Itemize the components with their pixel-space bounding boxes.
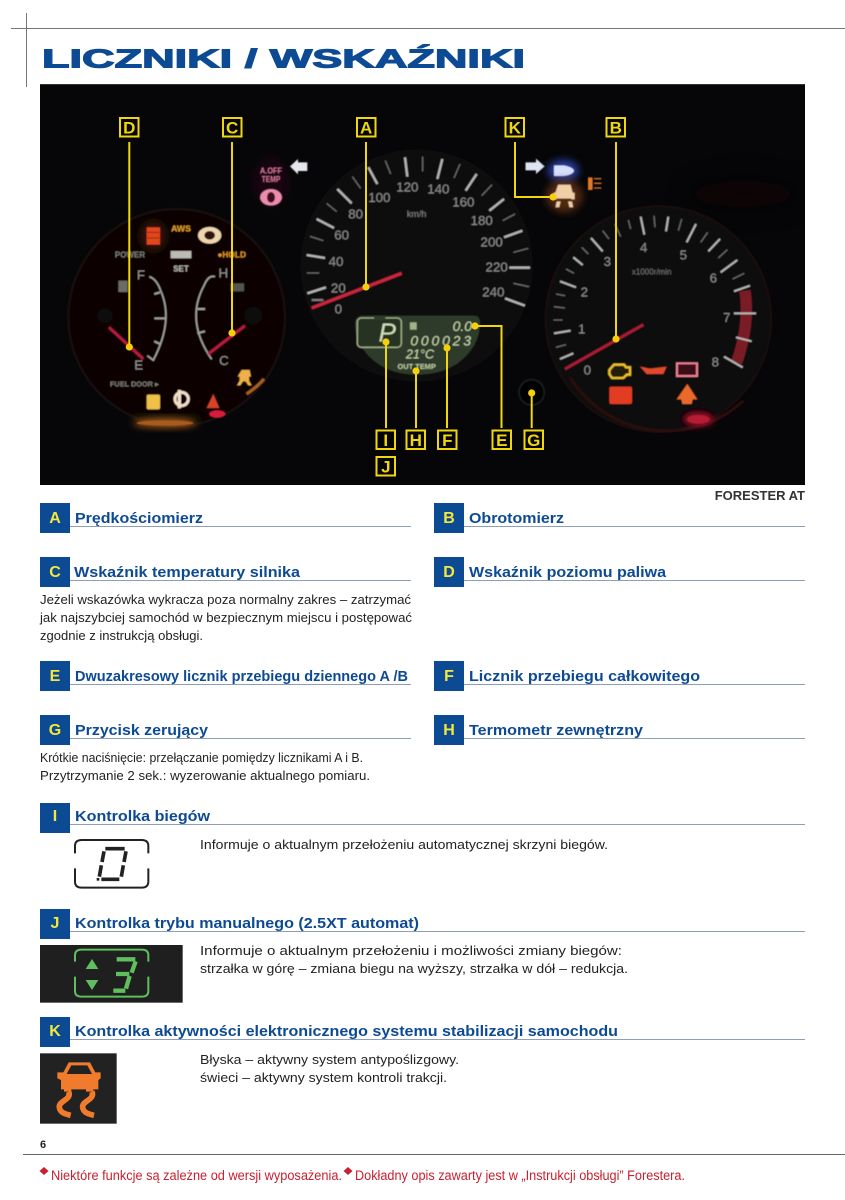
left cluster: fuel and temperature gauges: A.OFF: [260, 165, 282, 175]
item H: Termometr zewnętrzny: [469, 722, 644, 739]
label: A: A: [360, 118, 372, 138]
label: K: K: [509, 118, 522, 138]
rpm numbers: 4: [640, 240, 648, 255]
page number: 6: [40, 1139, 46, 1151]
item H: H: [443, 722, 455, 739]
item F: F: [444, 668, 454, 685]
label: E: [492, 430, 511, 450]
speed numbers: 0: [335, 301, 342, 316]
label: C: C: [226, 118, 238, 138]
footer note: [40, 1167, 685, 1183]
label: H: H: [410, 431, 422, 450]
speed numbers: 220: [486, 260, 508, 275]
gear indicator on LCD: [357, 316, 401, 347]
speedometer: [302, 151, 544, 405]
text: item G description: Przytrzymanie 2 sek.: wyzerowanie aktualnego pomiaru.: [40, 768, 370, 783]
item I: Kontrolka biegów: [75, 808, 210, 825]
gauge letters: [134, 266, 229, 372]
text: item C description: jak najszybciej samochód w bezpiecznym miejscu i postępować: [39, 610, 413, 625]
item H: [434, 715, 805, 745]
label: C: [223, 118, 242, 138]
speed numbers: 200: [481, 235, 503, 250]
label: G: G: [527, 431, 540, 450]
text: item K description: Błyska – aktywny system antypoślizgowy.: [200, 1052, 459, 1067]
speed numbers: [329, 180, 508, 316]
rpm numbers: 2: [581, 285, 588, 300]
item A: A: [49, 510, 61, 527]
text: item C description: Jeżeli wskazówka wykracza poza normalny zakres – zatrzymać: [40, 592, 412, 607]
item B: [434, 503, 805, 533]
label: H: [406, 430, 425, 450]
gauge letters: E: [134, 357, 143, 372]
speed numbers: 40: [329, 254, 343, 269]
item G: [40, 715, 411, 745]
label: F: F: [442, 431, 452, 450]
text: item G description: Krótkie naciśnięcie: przełączanie pomiędzy licznikami A i B.: [40, 750, 363, 765]
item C: [40, 557, 411, 587]
item E: Dwuzakresowy licznik przebiegu dziennego A /B: [75, 668, 408, 685]
label: B: [606, 118, 625, 138]
speed numbers: 140: [427, 182, 449, 197]
icon: stability control: [40, 1053, 117, 1124]
label: J: [376, 457, 395, 476]
gauge letters: F: [137, 268, 145, 283]
speed numbers: 20: [331, 281, 346, 296]
major ticks: [307, 157, 530, 306]
item D: D: [443, 564, 455, 581]
label: I: [376, 430, 395, 450]
left cluster: fuel and temperature gauges: TEMP: [262, 174, 281, 184]
speed numbers: 240: [482, 284, 504, 299]
speedometer: km/h: [407, 209, 426, 219]
item G: Przycisk zerujący: [75, 722, 209, 739]
rpm numbers: 3: [604, 254, 611, 269]
crop marks: [11, 13, 845, 87]
tachometer and warning lights: [525, 159, 803, 432]
footer note: Dokładny opis zawarty jest w „Instrukcji obsługi” Forestera.: [355, 1168, 685, 1183]
item A: [40, 503, 411, 533]
left cluster: fuel and temperature gauges: POWER: [115, 251, 145, 260]
item G: G: [49, 722, 61, 739]
item K: Kontrolka aktywności elektronicznego systemu stabilizacji samochodu: [75, 1023, 618, 1040]
item F: [434, 661, 805, 691]
panel: dashboard photo: [40, 84, 805, 485]
item J: J: [51, 915, 59, 932]
item J: [40, 909, 805, 939]
rpm numbers: 1: [578, 322, 585, 337]
left cluster: fuel and temperature gauges: AWS: [171, 223, 191, 233]
rpm numbers: 6: [710, 271, 717, 286]
speedometer: 000023: [410, 333, 471, 349]
rpm numbers: 5: [680, 247, 687, 262]
item B: B: [443, 510, 455, 527]
item I: [40, 803, 805, 833]
speedometer: 0.0: [453, 318, 472, 334]
item D: Wskaźnik poziomu paliwa: [469, 564, 667, 581]
item K: K: [49, 1023, 61, 1040]
item F: Licznik przebiegu całkowitego: [469, 668, 700, 685]
speed numbers: 60: [334, 227, 349, 242]
text: item J description: [200, 943, 628, 976]
tachometer and warning lights: x1000r/min: [632, 267, 671, 276]
speed numbers: 80: [348, 207, 363, 222]
rpm numbers: 7: [723, 310, 730, 325]
item C: C: [49, 564, 61, 581]
label: I: I: [383, 431, 388, 450]
label: J: J: [381, 458, 391, 476]
label: G: [524, 430, 543, 450]
footer note: Niektóre funkcje są zależne od wersji wyposażenia.: [51, 1168, 342, 1183]
gear indicator on LCD: P: [379, 317, 397, 347]
speed numbers: 180: [471, 213, 493, 228]
gauge letters: H: [219, 266, 228, 281]
label: B: B: [610, 118, 622, 138]
label: E: E: [496, 431, 507, 450]
title: LICZNIKI / WSKAŹNIKI: [42, 45, 525, 74]
speed numbers: 160: [452, 195, 474, 210]
speedometer: OUT TEMP: [397, 362, 436, 371]
label: K: [506, 118, 524, 138]
item E: E: [50, 668, 61, 685]
label: D: [120, 118, 138, 138]
item B: Obrotomierz: [469, 510, 564, 527]
text: item K description: [200, 1052, 459, 1085]
item A: Prędkościomierz: [75, 510, 203, 527]
left cluster: fuel and temperature gauges: [68, 157, 307, 427]
left cluster: fuel and temperature gauges: ●HOLD: [217, 250, 246, 260]
rpm numbers: 8: [712, 355, 719, 370]
icon: gear display D: [75, 840, 148, 888]
label: A: [357, 118, 376, 138]
item J: Kontrolka trybu manualnego (2.5XT automat): [75, 915, 419, 932]
item D: [434, 557, 805, 587]
item I: I: [53, 808, 57, 825]
text: item I description: Informuje o aktualnym przełożeniu automatycznej skrzyni biegów.: [200, 837, 608, 852]
left cluster: fuel and temperature gauges: SET: [173, 264, 189, 273]
text: item K description: świeci – aktywny system kontroli trakcji.: [200, 1070, 447, 1085]
text: item J description: strzałka w górę – zmiana biegu na wyższy, strzałka w dół – redukcja.: [200, 961, 628, 976]
callout lines and markers: [126, 142, 620, 428]
icon: manual mode display: [40, 945, 183, 1003]
caption: FORESTER AT: [715, 488, 805, 503]
speed numbers: 100: [368, 190, 390, 205]
item C: Wskaźnik temperatury silnika: [74, 564, 301, 581]
text: item C description: zgodnie z instrukcją obsługi.: [40, 628, 203, 643]
speedometer: 21°C: [405, 347, 435, 361]
label: D: D: [123, 118, 135, 138]
rpm numbers: 0: [584, 362, 591, 377]
speed numbers: 120: [396, 180, 418, 195]
label: F: [438, 430, 456, 450]
text: item J description: Informuje o aktualnym przełożeniu i możliwości zmiany biegów:: [200, 943, 622, 958]
gauge letters: C: [219, 353, 229, 368]
item K: [40, 1017, 805, 1047]
text: item C description: [39, 592, 413, 643]
item E: [40, 661, 411, 691]
rpm numbers: [578, 240, 730, 377]
text: item G description: [40, 750, 370, 783]
left cluster: fuel and temperature gauges: FUEL DOOR ▸: [110, 380, 159, 389]
